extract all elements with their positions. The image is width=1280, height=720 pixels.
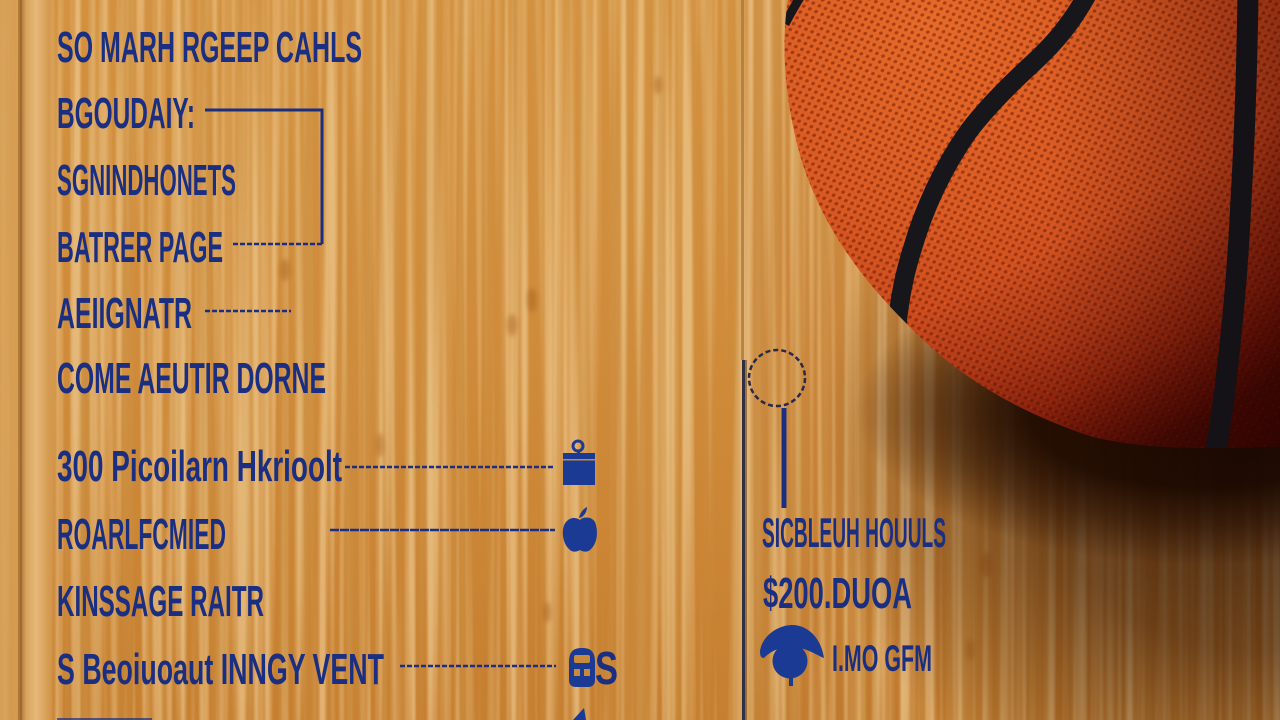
ball shadow on floor (810, 10, 1280, 720)
list item: 300 Picoilarn Hkrioolt: 300 Picoilarn Hkrioolt (57, 442, 342, 491)
wood knots (280, 76, 991, 661)
basketball (770, 0, 1280, 460)
icon: lock (563, 441, 595, 485)
list item: COME AEUTIR DORNE: COME AEUTIR DORNE (57, 354, 326, 403)
list item clipped at bottom edge (57, 718, 152, 720)
list item: BGOUDAIY: BGOUDAIY: (57, 89, 195, 138)
list item: BATRER PAGE: BATRER PAGE (57, 223, 223, 272)
stat value: $200.DUOA (763, 569, 912, 618)
panel: right stats (760, 509, 946, 686)
court seam line (741, 0, 747, 720)
connector: to apple icon (330, 529, 555, 531)
connector: bracket from BGOUDAIY to BATRER PAGE (205, 110, 322, 244)
stat caption: I.MO GFM (832, 638, 932, 679)
list item: SGNINDHONETS: SGNINDHONETS (57, 156, 236, 205)
connector: to lock icon (345, 466, 555, 468)
connector: to bag icon (400, 665, 556, 667)
list item: KINSSAGE RAITR: KINSSAGE RAITR (57, 577, 264, 626)
connector: AEIIGNATR dashed line (205, 310, 291, 312)
icon: bag with S (569, 642, 618, 694)
list item: ROARLFCMIED: ROARLFCMIED (57, 510, 226, 559)
heading: SO MARH RGEEP CAHLS (57, 23, 362, 72)
panel: left text column (57, 23, 384, 694)
icon: basketball hoop diagram (749, 350, 805, 508)
text: SICBLEUH HOUULS (762, 509, 946, 556)
icon: apple (563, 507, 597, 552)
list item: AEIIGNATR: AEIIGNATR (57, 289, 192, 338)
list item: S Beoiuoaut INNGY VENT: S Beoiuoaut INNGY VENT (57, 645, 384, 694)
icon: acorn (760, 625, 824, 686)
icon: clipped arrow tip (573, 708, 586, 720)
icon: bag with S: S (595, 642, 618, 694)
